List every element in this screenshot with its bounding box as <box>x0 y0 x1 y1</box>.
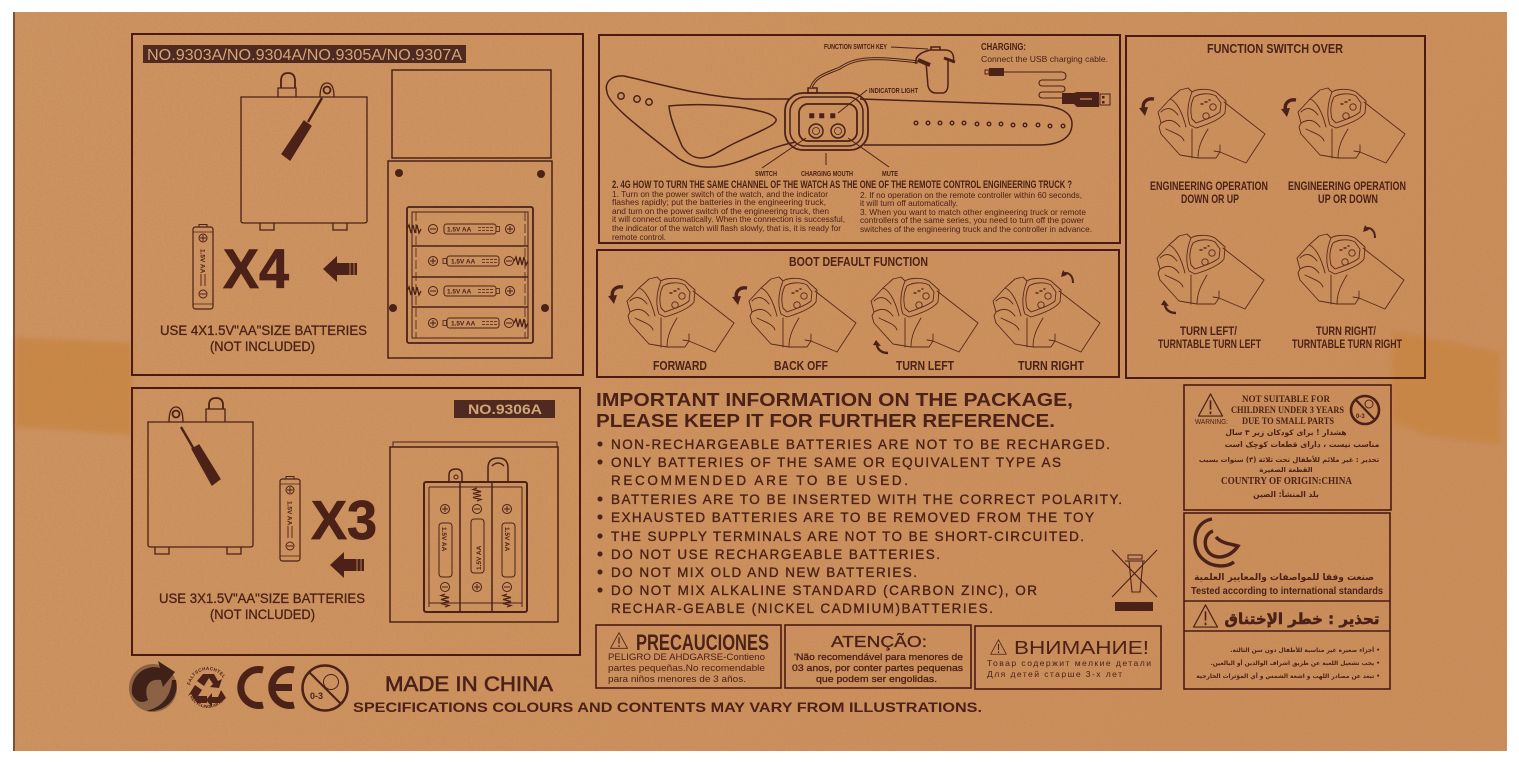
standards text: Tested according to international standards <box>1191 586 1383 597</box>
panel: Portuguese warning: que podem ser engolidas. <box>816 674 937 685</box>
battery safety list: RECOMMENDED ARE TO BE USED. <box>611 473 908 488</box>
icon: warning triangle <box>1198 394 1222 416</box>
callout labels: FUNCTION SWITCH KEY <box>824 42 887 51</box>
country of origin <box>1221 476 1353 499</box>
country of origin: COUNTRY OF ORIGIN:CHINA <box>1221 476 1353 487</box>
panel: Spanish warning <box>596 625 781 688</box>
open compartment with three batteries: 1.5V AA <box>503 527 510 552</box>
model number label <box>454 400 555 418</box>
battery safety list: THE SUPPLY TERMINALS ARE NOT TO BE SHORT-CIRCUITED. <box>611 529 1084 544</box>
icon: under three prohibited <box>302 666 348 710</box>
warning text: CHILDREN UNDER 3 YEARS <box>1231 406 1344 416</box>
instructions left column: the indicator of the watch will flash slowly, that is, it is ready for <box>612 223 841 233</box>
panel: Portuguese warning: 'Não recomendável para menores de <box>794 652 963 663</box>
instructions left column: and turn on the power switch of the engineering truck, then <box>612 206 829 216</box>
charging note <box>981 41 1108 64</box>
panel: Spanish warning: partes pequeñas.No recomendable <box>608 663 765 674</box>
hand: up or down: ENGINEERING OPERATION <box>1288 179 1406 193</box>
Arabic and Persian warning <box>1199 428 1380 474</box>
hand: down or up: ENGINEERING OPERATION <box>1150 179 1268 193</box>
battery safety list: DO NOT USE RECHARGEABLE BATTERIES. <box>611 547 940 562</box>
hand: turn right <box>993 270 1100 373</box>
icon: recycling mark: RECYCLINGKARTON <box>190 696 225 708</box>
battery safety list: DO NOT MIX OLD AND NEW BATTERIES. <box>611 565 917 580</box>
instructions left column: 1. Turn on the power switch of the watch, and the indicator <box>612 189 828 199</box>
open compartment with three batteries: 1.5V AA <box>440 527 447 552</box>
hand: back off <box>732 277 856 373</box>
charging note: CHARGING: <box>981 41 1026 53</box>
icon: recycling mark <box>187 666 226 708</box>
instructions left column <box>612 189 845 242</box>
panel: Russian warning: Товар содержит мелкие детали <box>987 658 1151 668</box>
panel: Portuguese warning <box>785 625 971 688</box>
Arabic and Persian warning: القطعة الصغيرة <box>1259 466 1313 474</box>
standards text <box>1191 573 1383 597</box>
panel: Russian warning <box>975 626 1161 689</box>
panel: function switch over <box>1126 36 1425 378</box>
specification disclaimer: SPECIFICATIONS COLOURS AND CONTENTS MAY VARY FROM ILLUSTRATIONS. <box>353 700 982 715</box>
icon: under three prohibited: 0-3 <box>1356 414 1365 420</box>
battery AA <box>193 224 213 309</box>
battery safety list: RECHAR-GEABLE (NICKEL CADMIUM)BATTERIES. <box>611 601 993 616</box>
instructions right column: controllers of the same series, you need to turn off the power <box>860 215 1084 225</box>
watch illustration <box>606 47 1072 167</box>
charging note: Connect the USB charging cable. <box>981 54 1108 64</box>
battery cover with screwdriver <box>148 398 253 554</box>
icon: under three prohibited <box>1351 396 1379 424</box>
panel: boot default function <box>597 250 1119 377</box>
Arabic and Persian warning: هشدار ! برای کودکان زیر ۳ سال <box>1225 428 1347 437</box>
icon: warning triangle <box>1194 605 1218 627</box>
callout labels: MUTE <box>882 169 898 178</box>
made in China: MADE IN CHINA <box>385 673 553 696</box>
hand: up or down <box>1281 88 1406 206</box>
battery safety list: EXHAUSTED BATTERIES ARE TO BE REMOVED FROM THE TOY <box>611 510 1094 525</box>
panel: Spanish warning: PELIGRO DE AHDGARSE-Contieno <box>608 652 765 663</box>
icon: CE mark <box>241 670 294 706</box>
battery safety list: ONLY BATTERIES OF THE SAME OR EQUIVALENT TYPE AS <box>611 455 1061 470</box>
Arabic and Persian warning: مناسب نیست ، دارای قطعات کوچک است <box>1225 440 1380 449</box>
callout labels: SWITCH <box>755 169 777 178</box>
heading: channel question: 2. 4G HOW TO TURN THE SAME CHANNEL OF THE WATCH AS THE ONE OF THE REMOTE CONTROL ENGINEERING TRUCK ? <box>612 179 1072 191</box>
heading: BOOT DEFAULT FUNCTION <box>789 254 928 269</box>
hand: turn left: TURN LEFT <box>896 358 954 373</box>
choking warning list: • أجزاء صغيرة غير مناسبة للأطفال دون سن الثالثة. <box>1230 646 1380 654</box>
hand: forward: FORWARD <box>653 358 707 373</box>
callout labels: INDICATOR LIGHT <box>869 86 918 95</box>
callout leaders <box>762 47 928 168</box>
hand: up or down: UP OR DOWN <box>1318 192 1378 206</box>
warning text <box>1231 395 1344 427</box>
multiplier X3: X3 <box>311 489 377 551</box>
hand: turntable left: TURN LEFT/ <box>1180 324 1238 338</box>
hand: turntable left <box>1157 234 1264 351</box>
icon: green dot <box>129 661 177 712</box>
country of origin: بلد المنشأ: الصين <box>1253 489 1319 499</box>
callout labels <box>755 42 918 178</box>
choking heading: تحذير : خطر الإختناق <box>1225 610 1379 628</box>
standards text: صنعت وفقا للمواصفات والمعايير العلمية <box>1194 573 1374 583</box>
panel: Russian warning: Для детей старше 3-х лет <box>987 669 1122 679</box>
instructions right column: 3. When you want to match other engineering truck or remote <box>860 207 1086 217</box>
panel: multilingual warning <box>1184 385 1391 510</box>
callout labels: CHARGING MOUTH <box>801 169 853 178</box>
heading: FUNCTION SWITCH OVER <box>1207 41 1344 56</box>
hand: turntable right <box>1292 225 1404 351</box>
panel: standards and choking warning <box>1184 513 1390 689</box>
instructions left column: flashes rapidly; put the batteries in the engineering truck, <box>612 197 826 207</box>
multiplier X4: X4 <box>223 237 289 300</box>
icon: standards logo <box>1195 519 1238 566</box>
battery instruction <box>159 590 365 622</box>
hand: forward <box>608 277 734 373</box>
hand: turntable left: TURNTABLE TURN LEFT <box>1158 337 1261 351</box>
open compartment with three batteries: 1.5V AA <box>476 545 483 570</box>
panel: multilingual warning: WARNING: <box>1195 419 1228 426</box>
choking warning list: • يجب تشغيل اللعبة عن طريق اشراف الوالدين أو البالغين. <box>1210 659 1380 667</box>
hand: turn right: TURN RIGHT <box>1018 358 1084 373</box>
panel: Spanish warning: PRECAUCIONES <box>636 630 769 655</box>
Arabic and Persian warning: تحذير : غير ملائم للأطفال تحت ثلاثة (٣) سنوات بسبب <box>1199 455 1380 464</box>
instructions right column: switches of the engineering truck and the controller in advance. <box>860 224 1092 234</box>
hand: down or up <box>1139 88 1268 206</box>
icon: usb cable <box>985 68 1110 107</box>
battery instruction: USE 3X1.5V"AA"SIZE BATTERIES <box>159 590 365 606</box>
panel: watch controller diagram <box>599 35 1120 243</box>
heading: important information <box>596 390 1073 431</box>
heading: important information: IMPORTANT INFORMATION ON THE PACKAGE, <box>596 390 1073 410</box>
instructions left column: it will connect automatically. When the connection is successful, <box>612 214 845 224</box>
battery AA <box>280 476 300 561</box>
hand: down or up: DOWN OR UP <box>1181 192 1239 206</box>
arrow <box>330 552 364 578</box>
warning text: NOT SUITABLE FOR <box>1242 395 1330 405</box>
battery safety list: DO NOT MIX ALKALINE STANDARD (CARBON ZINC), OR <box>611 583 1037 598</box>
panel: Portuguese warning: 03 anos, por conter partes pequenas <box>792 663 963 674</box>
battery instruction: USE 4X1.5V"AA"SIZE BATTERIES <box>160 322 367 338</box>
panel: four battery installation <box>132 34 583 375</box>
panel: Portuguese warning: ATENÇÃO: <box>831 634 927 651</box>
icon: recycling mark: FALTSCHACHTEL <box>187 666 225 685</box>
panel: Spanish warning: para niños menores de 3 años. <box>608 674 746 685</box>
choking warning list: • تبعد عن مصادر اللهب و اشعة الشمس و أي المؤثرات الخارجية <box>1196 672 1380 680</box>
model number label: NO.9303A/NO.9304A/NO.9305A/NO.9307A <box>147 47 462 64</box>
heading: important information: PLEASE KEEP IT FOR FURTHER REFERENCE. <box>596 411 1055 431</box>
choking warning list <box>1196 646 1380 680</box>
battery safety list <box>598 437 1122 616</box>
battery instruction <box>160 322 367 354</box>
open compartment with four batteries <box>388 70 552 358</box>
arrow <box>323 256 357 282</box>
icon: under three prohibited: 0-3 <box>310 691 323 701</box>
instructions right column: it will turn off automatically. <box>860 198 958 208</box>
icon: crossed-out bin <box>1112 550 1157 611</box>
battery instruction: (NOT INCLUDED) <box>210 338 315 354</box>
open compartment with three batteries <box>390 442 558 622</box>
hand: back off: BACK OFF <box>774 358 828 373</box>
panel: three battery installation <box>132 388 580 655</box>
hand: turn left <box>871 277 978 373</box>
instructions left column: remote control. <box>612 232 666 242</box>
battery safety list: NON-RECHARGEABLE BATTERIES ARE NOT TO BE RECHARGED. <box>611 437 1110 452</box>
warning text: DUE TO SMALL PARTS <box>1242 417 1334 427</box>
battery instruction: (NOT INCLUDED) <box>210 606 315 622</box>
certification icons <box>129 661 349 712</box>
panel: Russian warning: ВНИМАНИЕ! <box>1014 638 1149 658</box>
instructions right column <box>860 190 1092 234</box>
hand: turntable right: TURNTABLE TURN RIGHT <box>1292 337 1402 351</box>
battery cover with screwdriver <box>241 73 367 230</box>
model number label: NO.9306A <box>468 401 542 417</box>
hand: turntable right: TURN RIGHT/ <box>1316 324 1377 338</box>
battery safety list: BATTERIES ARE TO BE INSERTED WITH THE CORRECT POLARITY. <box>611 492 1122 507</box>
instructions right column: 2. If no operation on the remote controller within 60 seconds, <box>860 190 1082 200</box>
